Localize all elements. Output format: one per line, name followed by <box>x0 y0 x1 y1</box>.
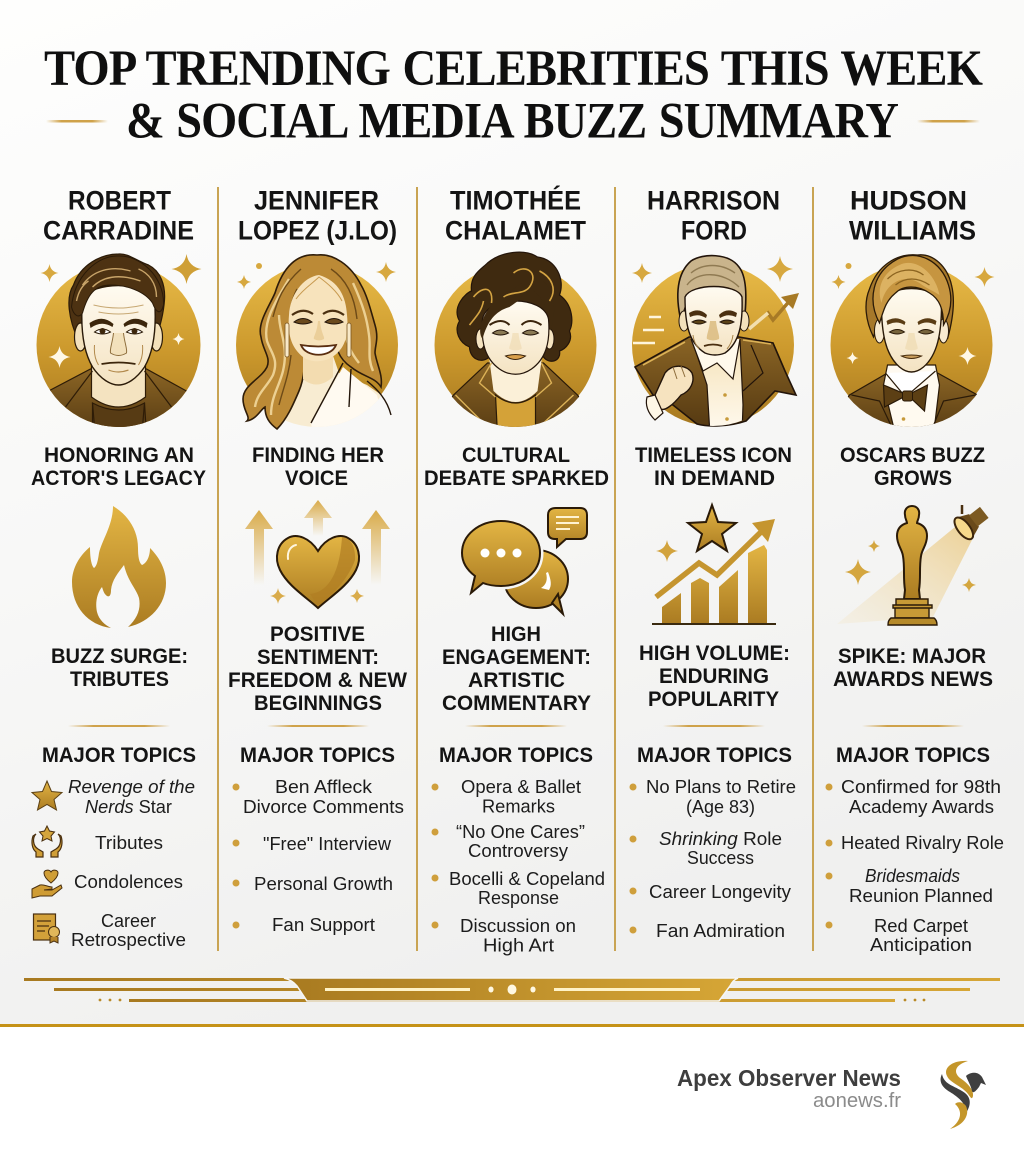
name: Timothée Chalamet: CHALAMET <box>445 216 586 246</box>
topic: Career Retrospective: Career <box>101 910 156 931</box>
subheading: Cultural Debate Sparked: CULTURAL <box>462 444 570 467</box>
buzz: High Engagement: ARTISTIC <box>468 669 565 692</box>
buzz: High Volume: POPULARITY <box>648 688 779 711</box>
subheading: Oscars Buzz Grows <box>840 444 985 490</box>
topic: Condolences <box>32 870 183 898</box>
portrait: Hudson Williams <box>830 254 994 427</box>
topic: Bocelli and Copeland Response: Bocelli & Copeland <box>449 868 605 889</box>
buzz: Positive Sentiment: FREEDOM & NEW <box>228 669 407 692</box>
name: Robert Carradine: ROBERT <box>68 186 171 216</box>
name: Harrison Ford: FORD <box>681 216 747 246</box>
topic: Discussion on High Art: Discussion on <box>460 915 576 936</box>
icon: award statue with spotlight <box>837 502 992 625</box>
buzz: Spike <box>833 645 993 691</box>
portrait: Robert Carradine <box>36 253 202 427</box>
topic: No One Cares Controversy: “No One Cares” <box>456 821 585 842</box>
topic: Ben Affleck Divorce Comments: Divorce Comments <box>243 796 404 817</box>
icon: brand logo <box>941 1061 986 1129</box>
buzz: Spike: AWARDS NEWS <box>833 668 993 691</box>
topic: Fan Admiration: Fan Admiration <box>656 920 785 941</box>
topic: Red Carpet Anticipation: Anticipation <box>870 934 972 955</box>
topic: Fan Support: Fan Support <box>272 914 375 935</box>
topic: Confirmed for 98th Academy Awards <box>826 776 1001 817</box>
portrait: Jennifer Lopez <box>236 255 407 435</box>
footer rule <box>0 1024 1024 1027</box>
topic: Confirmed for 98th Academy Awards: Academy Awards <box>849 796 994 817</box>
topic: Revenge of the Nerds Star <box>32 776 195 817</box>
column dividers <box>217 187 814 951</box>
subheading: Oscars Buzz Grows: OSCARS BUZZ <box>840 444 985 467</box>
subheading: Finding Her Voice: VOICE <box>285 467 348 490</box>
panel: Robert Carradine <box>28 186 208 950</box>
topic: Bridesmaids Reunion Planned <box>826 865 993 906</box>
buzz: Spike: SPIKE: MAJOR <box>838 645 986 668</box>
name: Jennifer Lopez <box>238 186 397 246</box>
buzz: High Engagement <box>442 623 591 715</box>
name: Harrison Ford <box>647 186 780 246</box>
buzz: High Volume: ENDURING <box>659 665 769 688</box>
title: & SOCIAL MEDIA BUZZ SUMMARY <box>126 94 898 150</box>
icon: heart with rising arrows <box>245 500 390 608</box>
title <box>44 41 983 150</box>
subheading: Honoring an Actor's Legacy: HONORING AN <box>44 444 194 467</box>
topic: Discussion on High Art: High Art <box>483 934 554 956</box>
topic: Red Carpet Anticipation: Red Carpet <box>874 915 968 936</box>
topic: Revenge of the Nerds Star: Nerds Star <box>85 796 172 817</box>
buzz: High Engagement: ENGAGEMENT: <box>442 646 591 669</box>
panel: Harrison Ford <box>630 186 799 941</box>
heading: Major Topics: MAJOR TOPICS <box>836 744 990 767</box>
buzz: High Engagement: COMMENTARY <box>442 692 591 715</box>
topic: Free Interview: "Free" Interview <box>263 833 392 854</box>
topic: No Plans to Retire: (Age 83) <box>686 796 755 817</box>
subheading: Oscars Buzz Grows: GROWS <box>874 467 952 490</box>
topic: Ben Affleck Divorce Comments: Ben Affleck <box>275 776 373 797</box>
name: Hudson Williams: HUDSON <box>850 186 967 216</box>
icon: flame <box>72 506 166 628</box>
name: Timothée Chalamet: TIMOTHÉE <box>450 186 581 216</box>
buzz: Positive Sentiment: BEGINNINGS <box>254 692 382 715</box>
buzz: Buzz Surge: BUZZ SURGE: <box>51 645 188 668</box>
name: Jennifer Lopez: LOPEZ (J.LO) <box>238 216 397 246</box>
subheading: Honoring an Actor's Legacy <box>31 444 206 490</box>
heading: Major Topics: MAJOR TOPICS <box>439 744 593 767</box>
buzz: Positive Sentiment <box>228 623 407 715</box>
subheading: Timeless Icon in Demand: TIMELESS ICON <box>635 444 792 467</box>
topic: Bocelli and Copeland Response <box>432 868 605 908</box>
subheading: Timeless Icon in Demand <box>635 444 792 490</box>
portrait: Timothée Chalamet <box>434 252 596 427</box>
name: Hudson Williams: WILLIAMS <box>849 216 976 246</box>
heading: Major Topics: MAJOR TOPICS <box>637 744 792 767</box>
buzz: Positive Sentiment: POSITIVE <box>270 623 365 646</box>
topic: Red Carpet Anticipation <box>826 915 972 955</box>
topic: Career Longevity: Career Longevity <box>649 881 792 902</box>
topic: Personal Growth: Personal Growth <box>254 873 393 894</box>
heading: Major Topics: MAJOR TOPICS <box>240 744 395 767</box>
topic: Discussion on High Art <box>432 915 576 956</box>
icon: chat bubbles <box>462 508 587 614</box>
footer brand text: aonews.fr <box>813 1090 901 1112</box>
heading: Major Topics: MAJOR TOPICS <box>42 744 196 767</box>
topic: Opera and Ballet Remarks: Opera & Ballet <box>461 776 581 797</box>
topic: Bridesmaids Reunion Planned: Bridesmaids <box>865 865 960 886</box>
topic: No Plans to Retire: No Plans to Retire <box>646 776 796 797</box>
panel: Timothée Chalamet <box>424 186 609 956</box>
subheading: Finding Her Voice: FINDING HER <box>252 444 384 467</box>
topic: Opera and Ballet Remarks <box>432 776 581 816</box>
subheading: Honoring an Actor's Legacy: ACTOR'S LEGACY <box>31 467 206 490</box>
buzz: High Volume: HIGH VOLUME: <box>639 642 790 665</box>
topic: Revenge of the Nerds Star: Revenge of the <box>68 776 195 797</box>
subheading: Finding Her Voice <box>252 444 384 490</box>
name: Robert Carradine <box>43 186 194 246</box>
topic: Bocelli and Copeland Response: Response <box>478 887 559 908</box>
name: Hudson Williams <box>849 186 976 246</box>
buzz: Buzz Surge: TRIBUTES <box>70 668 169 691</box>
bottom ornament <box>24 978 1000 1002</box>
icon: rising bar chart with star <box>652 505 776 625</box>
topic: Confirmed for 98th Academy Awards: Confirmed for 98th <box>841 776 1001 797</box>
name: Jennifer Lopez: JENNIFER <box>254 186 379 216</box>
subheading: Timeless Icon in Demand: IN DEMAND <box>654 467 775 490</box>
buzz: Buzz Surge <box>51 645 188 691</box>
topic: Career Retrospective <box>34 910 186 950</box>
topic: Bridesmaids Reunion Planned: Reunion Planned <box>849 885 993 906</box>
topic: No One Cares Controversy: Controversy <box>468 840 569 861</box>
footer brand text <box>677 1065 901 1112</box>
buzz: High Engagement: HIGH <box>491 623 541 646</box>
topic: Shrinking Role Success: Success <box>687 847 754 868</box>
topic: No One Cares Controversy <box>432 821 585 861</box>
panel: Hudson Williams <box>822 186 1004 955</box>
topic: Opera and Ballet Remarks: Remarks <box>482 796 555 816</box>
topic: Heated Rivalry Role: Heated Rivalry Role <box>841 832 1004 853</box>
topic: Ben Affleck Divorce Comments <box>232 776 404 817</box>
topic: No Plans to Retire <box>630 776 796 817</box>
topic: Tributes <box>32 826 163 857</box>
name: Timothée Chalamet <box>445 186 586 246</box>
topic: Condolences: Condolences <box>74 871 183 892</box>
footer brand text: Apex Observer News <box>677 1065 901 1091</box>
subheading: Cultural Debate Sparked: DEBATE SPARKED <box>424 467 609 490</box>
buzz: Positive Sentiment: SENTIMENT: <box>257 646 379 669</box>
topic: Shrinking Role Success <box>630 828 782 868</box>
name: Robert Carradine: CARRADINE <box>43 216 194 246</box>
subheading: Cultural Debate Sparked <box>424 444 609 490</box>
panel: Jennifer Lopez <box>228 186 407 935</box>
topic: Career Retrospective: Retrospective <box>71 929 186 950</box>
topic: Shrinking Role Success: Shrinking Role <box>659 828 782 849</box>
topic: Tributes: Tributes <box>95 832 163 853</box>
portrait: Harrison Ford <box>632 256 799 435</box>
name: Harrison Ford: HARRISON <box>647 186 780 216</box>
buzz: High Volume <box>639 642 790 711</box>
